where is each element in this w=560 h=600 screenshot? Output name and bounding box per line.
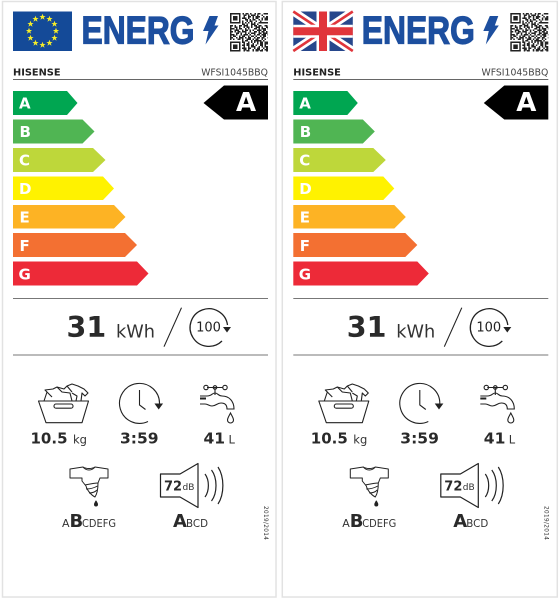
energy consumption (347, 308, 511, 347)
unit: kWh: kWh (396, 322, 435, 342)
metric: noise class: dB (463, 483, 475, 493)
metric: spin class: A (62, 517, 70, 530)
bar B (293, 120, 375, 144)
bar C: C (19, 152, 30, 170)
metric: duration (120, 383, 162, 448)
bar D (13, 176, 114, 200)
metric: duration (400, 383, 442, 448)
icon: 100 cycles (190, 309, 231, 346)
icon: lightning bolt (483, 16, 499, 44)
metric: water: 41 (204, 430, 225, 448)
icon: EU flag (13, 12, 72, 51)
regulation number: 2019/2014 (542, 506, 548, 540)
metric: noise class: A (453, 511, 467, 532)
supplier name: HISENSE (293, 68, 341, 78)
metric: spin class: A (342, 517, 350, 530)
metric: water: L (509, 432, 516, 446)
bar E (13, 205, 126, 228)
bar G: G (299, 266, 311, 284)
bar F (13, 233, 137, 257)
value: 31: 31 (66, 311, 106, 344)
bar B (13, 120, 94, 144)
bar G (13, 262, 148, 286)
icon: 100 cycles (470, 309, 511, 346)
bar A (293, 91, 358, 115)
bar G (293, 262, 429, 286)
supplier name: HISENSE (13, 68, 61, 78)
chart: energy efficiency scale (13, 91, 148, 286)
chart: energy efficiency scale (293, 91, 429, 286)
model number: WFSI1045BBQ (482, 68, 548, 78)
bar A (13, 91, 78, 115)
metric: spin class: B (70, 511, 83, 532)
energy consumption (66, 308, 231, 347)
rating arrow: A (484, 86, 548, 120)
metric: noise class: A (173, 511, 187, 532)
metric: capacity: 10.5 (30, 430, 68, 448)
metric: water (200, 385, 236, 448)
bar D: D (19, 180, 31, 198)
regulation number: 2019/2014 (262, 506, 268, 540)
metric: capacity (30, 384, 88, 448)
value: 31: 31 (347, 311, 386, 344)
icon: UK flag (293, 12, 353, 51)
metric: capacity: kg (353, 432, 367, 446)
unit: kWh: kWh (116, 322, 155, 342)
bar G: G (18, 266, 31, 284)
bar B: B (20, 123, 31, 141)
metric: spin class: CDEFG (82, 518, 116, 530)
metric: noise class: 72 (164, 480, 182, 494)
bar E: E (300, 208, 310, 226)
metric: noise class: BCD (466, 517, 488, 530)
icon: lightning bolt (203, 16, 218, 44)
metric: noise class: dB (182, 483, 194, 493)
metric: water (480, 385, 516, 448)
metric: capacity: kg (73, 432, 87, 446)
metric: duration: 3:59 (400, 430, 439, 448)
panel: UK energy label (282, 2, 557, 597)
bar E: E (20, 208, 30, 226)
metric: water: 41 (484, 430, 505, 448)
metric: capacity: 10.5 (311, 430, 348, 448)
heading: ENERG: ENERG (82, 10, 194, 52)
bar C (13, 148, 106, 172)
icon: QR code (230, 14, 268, 51)
metric: spin class (342, 467, 396, 532)
metric: water: L (228, 432, 236, 446)
bar A: A (19, 94, 31, 112)
heading: ENERG: ENERG (362, 10, 475, 52)
metric: noise class (160, 464, 223, 532)
metric: capacity (311, 384, 369, 448)
bar F (293, 233, 417, 257)
rating arrow: A: A (236, 88, 256, 118)
panel border (282, 2, 557, 597)
metric: noise class: 72 (444, 480, 462, 494)
bar F: F (300, 237, 310, 255)
bar D: D (299, 180, 312, 198)
bar C: C (299, 152, 310, 170)
bar D (293, 176, 394, 200)
bar A: A (299, 94, 311, 112)
bar E (293, 205, 406, 228)
panel: EU energy label (2, 2, 276, 597)
bar B: B (300, 123, 311, 141)
rating arrow: A: A (516, 88, 536, 118)
metric: noise class: BCD (186, 517, 208, 530)
rating arrow: A (204, 86, 268, 120)
model number: WFSI1045BBQ (201, 68, 268, 78)
metric: noise class (441, 464, 503, 532)
icon: QR code (510, 14, 548, 51)
metric: duration: 3:59 (120, 430, 159, 448)
bar F: F (20, 237, 30, 255)
metric: spin class: B (350, 511, 364, 532)
icon: 100 cycles: 100 (196, 320, 221, 336)
metric: spin class (62, 467, 116, 532)
icon: 100 cycles: 100 (476, 320, 501, 336)
bar C (293, 148, 386, 172)
metric: spin class: CDEFG (362, 518, 396, 530)
panel border (2, 2, 276, 597)
